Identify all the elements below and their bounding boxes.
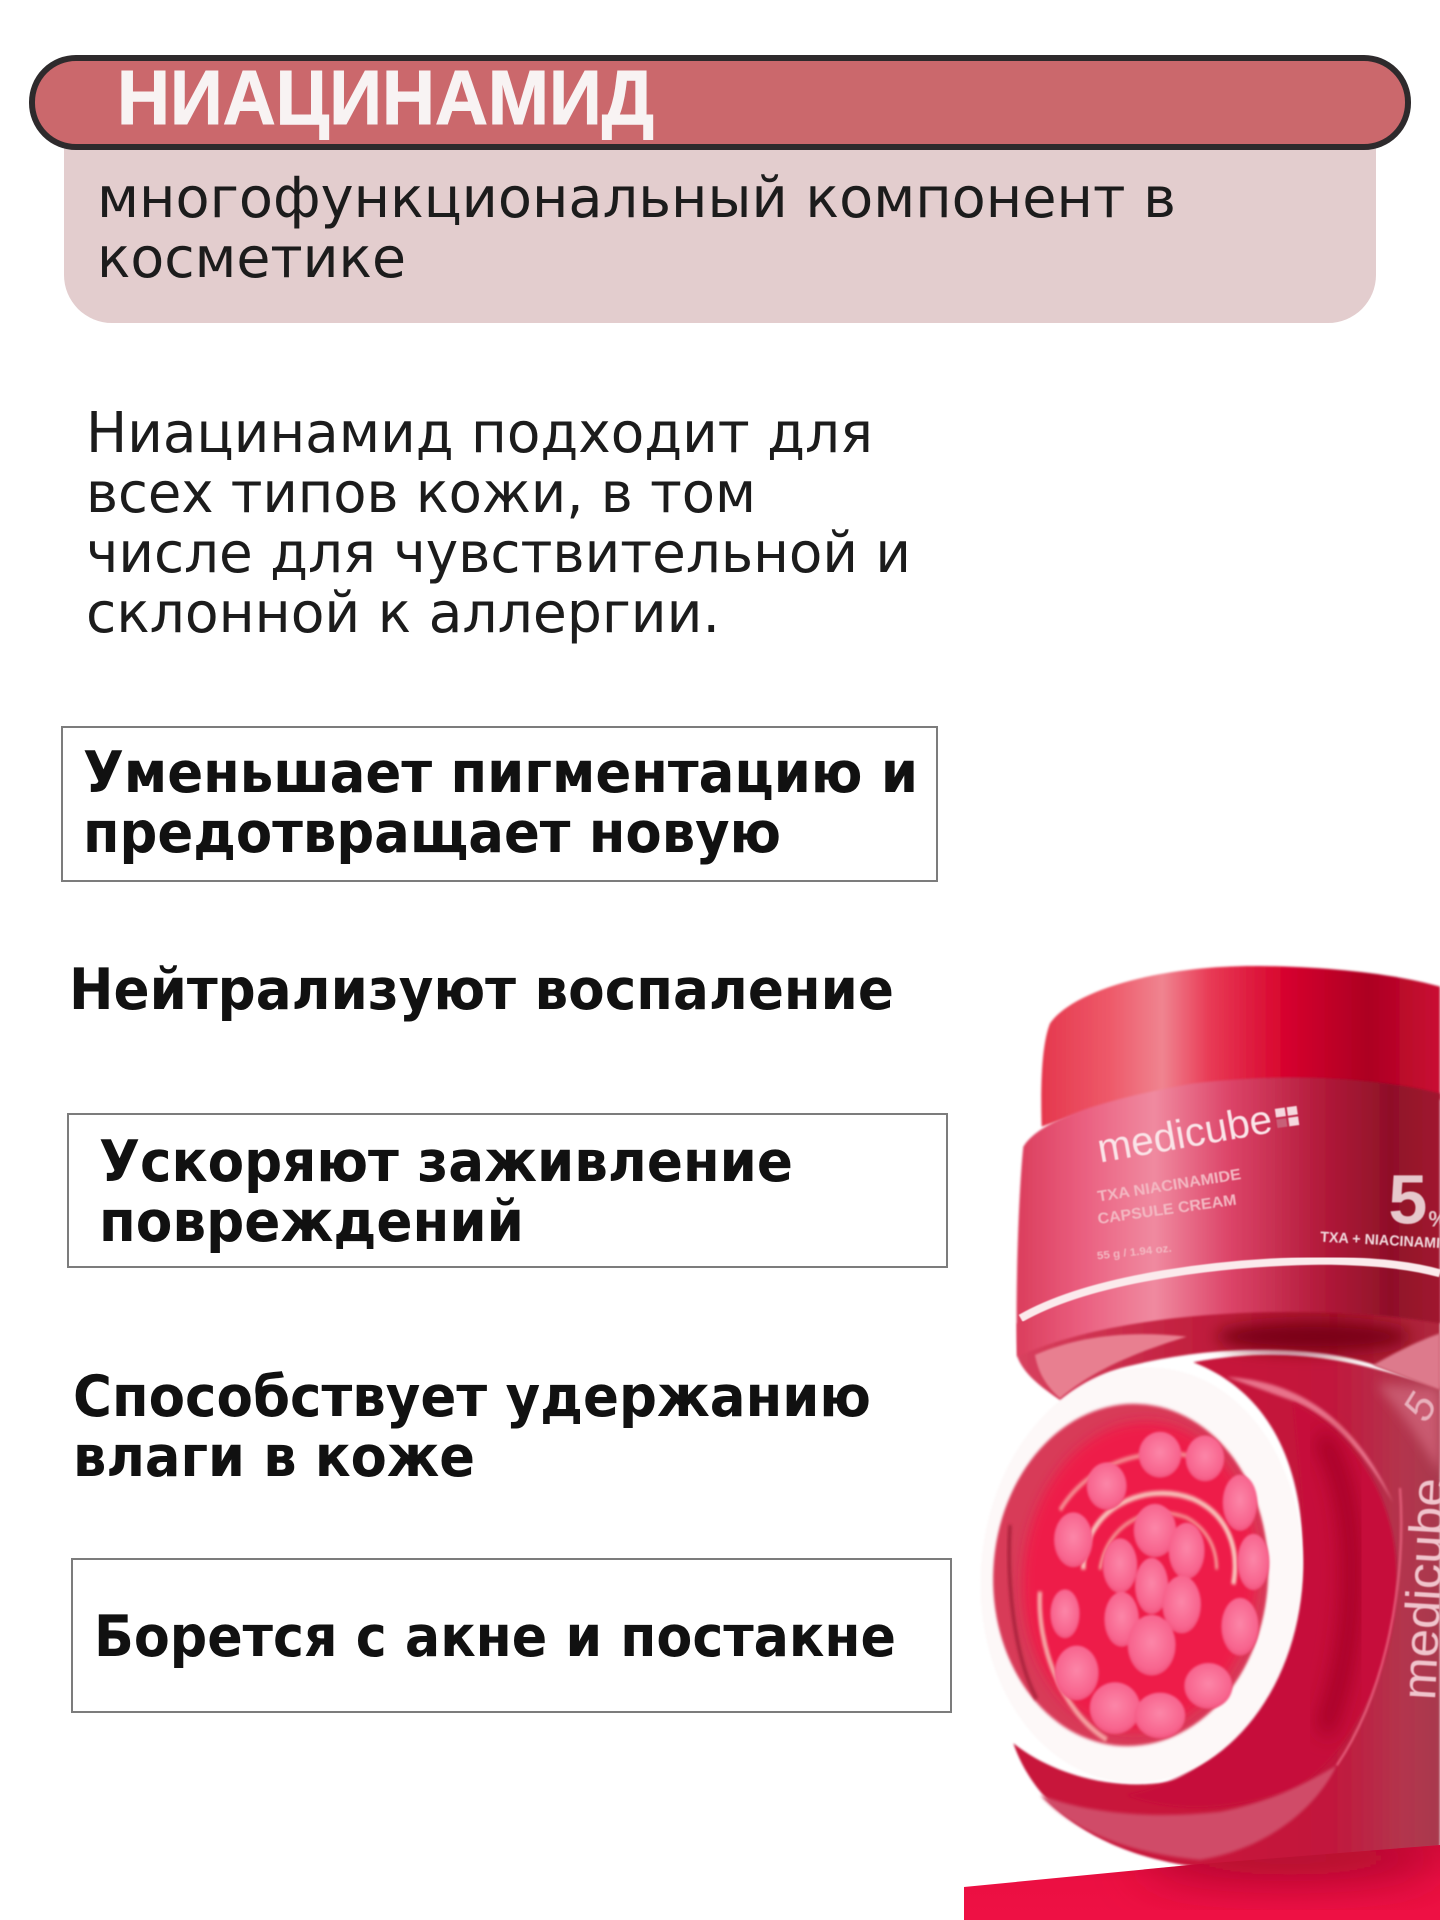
intro paragraph: числе для чувствительной и	[86, 521, 911, 586]
benefit box: pigmentation	[62, 727, 937, 881]
description text	[97, 166, 1176, 291]
benefit box: healing: Ускоряют заживление	[99, 1129, 793, 1195]
capsules	[1050, 1432, 1269, 1738]
brand cross icon	[1275, 1106, 1299, 1128]
jar body	[1013, 1355, 1440, 1867]
brand text: TXA NIACINAMIDE	[1096, 1166, 1242, 1206]
intro paragraph: склонной к аллергии.	[86, 581, 720, 646]
inner jar with gel	[978, 1389, 1283, 1761]
benefit: moisture: влаги в коже	[73, 1424, 475, 1490]
description panel	[64, 100, 1376, 323]
label band	[1017, 1077, 1440, 1357]
benefit box: healing: повреждений	[99, 1189, 524, 1255]
ribbed neck	[1127, 1403, 1397, 1807]
jar lid	[1041, 966, 1440, 1127]
white rim	[956, 1344, 1327, 1806]
intro paragraph	[86, 401, 911, 646]
underside of jar	[1017, 1273, 1440, 1400]
benefit: moisture: Способствует удержанию	[73, 1364, 871, 1430]
benefit: inflammation: Нейтрализуют воспаление	[69, 957, 894, 1023]
pill shape	[32, 58, 1408, 147]
intro paragraph: всех типов кожи, в том	[86, 461, 756, 526]
lower jar with capsules	[956, 1344, 1440, 1867]
red platform	[964, 1838, 1440, 1920]
upper jar with lid	[1017, 966, 1440, 1400]
intro paragraph: Ниацинамид подходит для	[86, 401, 873, 466]
brand text	[1094, 1096, 1440, 1262]
benefit box: acne	[72, 1559, 951, 1712]
title: НИАЦИНАМИД	[117, 55, 654, 141]
brand text: medicube	[1094, 1096, 1276, 1172]
header: title pill	[32, 55, 1408, 323]
dark shadow under jar	[1217, 1322, 1410, 1352]
description text: многофункциональный компонент в	[97, 166, 1176, 231]
brand text: TXA + NIACINAMI	[1320, 1230, 1440, 1252]
brand text: 55 g / 1.94 oz.	[1096, 1243, 1172, 1262]
benefit: moisture	[73, 1364, 871, 1490]
platform shadow	[1140, 1838, 1440, 1878]
brand text: CAPSULE CREAM	[1097, 1192, 1238, 1228]
benefit box: acne: Борется с акне и постакне	[94, 1604, 896, 1670]
benefit box: healing	[68, 1114, 947, 1267]
description text: косметике	[97, 226, 406, 291]
benefit box: pigmentation: Уменьшает пигментацию и	[83, 740, 918, 806]
pink underside swoosh	[1035, 1334, 1187, 1398]
product photo: jars on red platform	[956, 966, 1440, 1920]
pink shoulder highlight	[1227, 1377, 1393, 1503]
white stripe	[1021, 1261, 1440, 1318]
brand text: 5	[1388, 1160, 1427, 1238]
lower crescent	[1040, 1766, 1337, 1860]
benefit box: pigmentation: предотвращает новую	[83, 800, 781, 866]
